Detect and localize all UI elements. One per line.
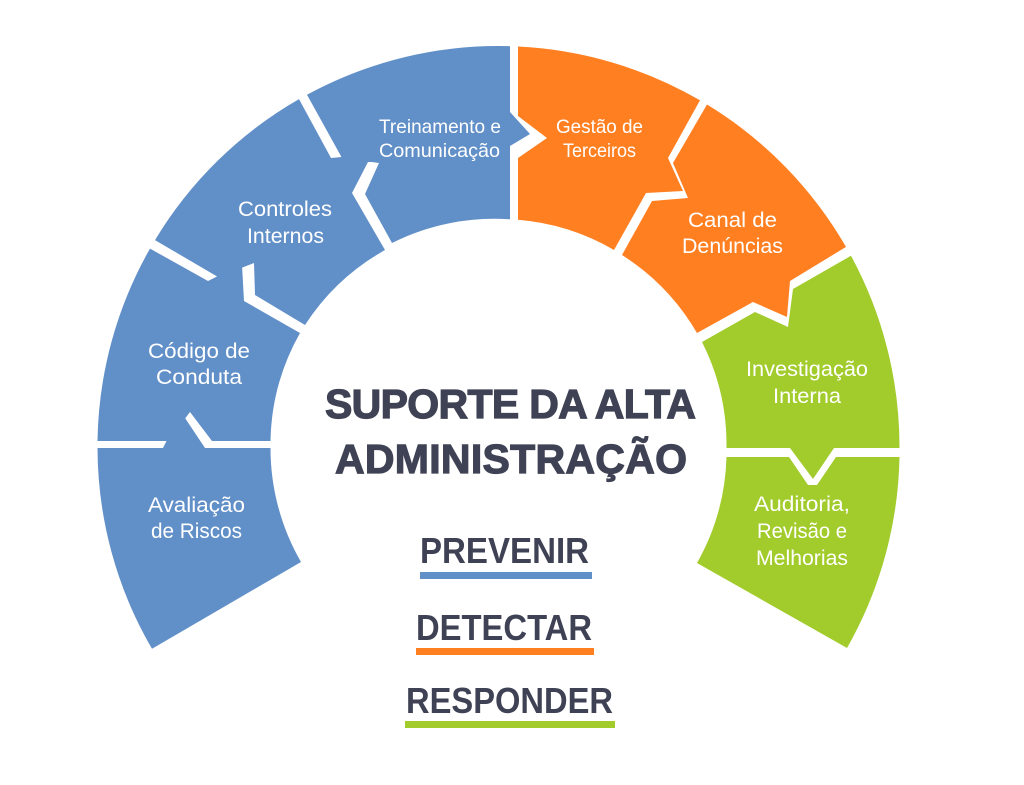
segment: Investigação Interna: Investigação bbox=[746, 358, 868, 381]
segment: Auditoria, Revisão e Melhorias bbox=[697, 457, 900, 648]
segment: Controles Internos: Controles bbox=[238, 198, 332, 221]
legend: Responder: RESPONDER bbox=[406, 680, 613, 721]
segment: Investigação Interna bbox=[702, 256, 900, 479]
segment: Gestão de Terceiros bbox=[518, 46, 700, 250]
segment: Controles Internos: Internos bbox=[247, 225, 324, 248]
segment: Gestão de Terceiros: Terceiros bbox=[563, 140, 636, 162]
title bbox=[325, 381, 696, 482]
segment: Avaliação de Riscos bbox=[98, 412, 301, 649]
legend: Prevenir: PREVENIR bbox=[420, 530, 589, 571]
segment: Gestão de Terceiros: Gestão de bbox=[556, 116, 643, 138]
segment: Avaliação de Riscos: Avaliação bbox=[148, 494, 245, 517]
segment: Auditoria, Revisão e Melhorias: Auditoria, bbox=[754, 493, 850, 516]
title: ADMINISTRAÇÃO bbox=[335, 436, 687, 482]
segment: Treinamento e Comunicação bbox=[307, 46, 530, 243]
segment: Código de Conduta: Código de bbox=[148, 340, 250, 363]
segment: Treinamento e Comunicação: Treinamento e bbox=[379, 116, 501, 138]
segment: Código de Conduta bbox=[98, 249, 300, 441]
segment: Investigação Interna: Interna bbox=[773, 385, 841, 408]
segment: Avaliação de Riscos: de Riscos bbox=[151, 520, 242, 543]
segment: Auditoria, Revisão e Melhorias: Melhorias bbox=[756, 547, 848, 570]
segment: Canal de Denúncias bbox=[622, 104, 846, 333]
legend: Detectar: DETECTAR bbox=[416, 607, 592, 648]
segment: Treinamento e Comunicação: Comunicação bbox=[379, 140, 500, 162]
segment: Auditoria, Revisão e Melhorias: Revisão e bbox=[757, 520, 847, 543]
segment: Canal de Denúncias: Canal de bbox=[688, 209, 777, 232]
segment: Controles Internos bbox=[155, 99, 385, 325]
segment: Canal de Denúncias: Denúncias bbox=[682, 235, 783, 258]
segment: Código de Conduta: Conduta bbox=[156, 366, 242, 389]
title: SUPORTE DA ALTA bbox=[325, 381, 696, 427]
